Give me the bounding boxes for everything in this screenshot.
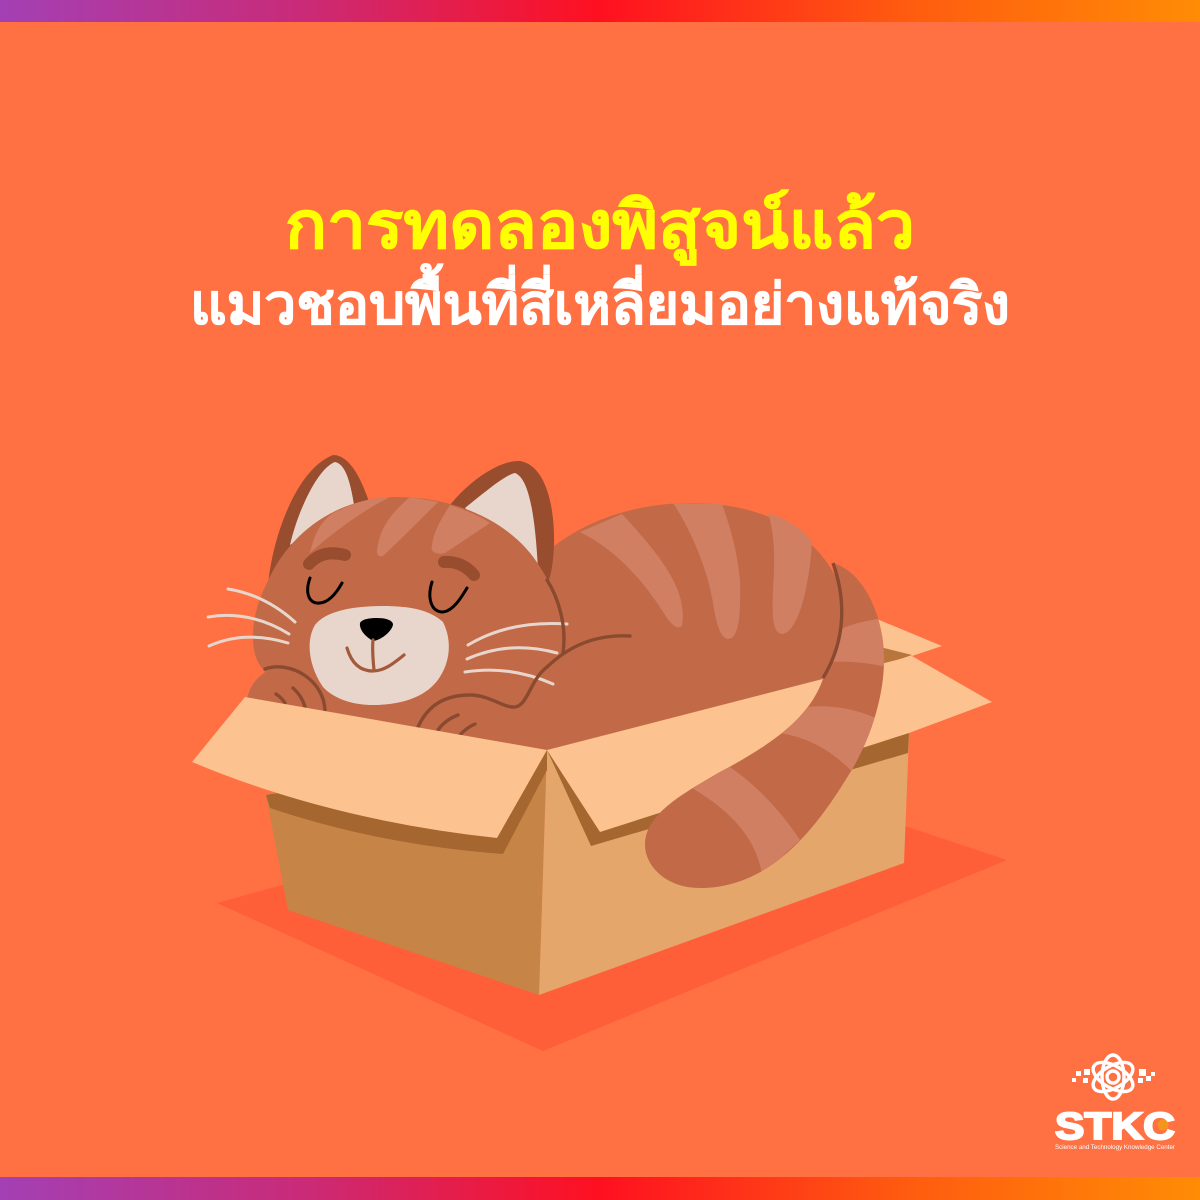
logo: STKC — [1055, 1055, 1175, 1151]
tail over flap — [645, 563, 890, 888]
cat body — [300, 503, 841, 752]
left flap — [192, 697, 547, 838]
bottom gradient bar — [0, 1177, 1200, 1200]
logo orange dot — [1158, 1120, 1168, 1130]
title line 1: การทดลองพิสูจน์แล้ว — [285, 188, 915, 266]
muzzle — [310, 606, 449, 705]
title line 2: แมวชอบพื้นที่สี่เหลี่ยมอย่างแท้จริง — [190, 264, 1010, 336]
tail stripes — [692, 617, 890, 875]
cat outline lines — [265, 580, 630, 735]
box left face — [266, 750, 547, 995]
closed eyes — [308, 578, 342, 603]
left inner shadow band — [266, 750, 547, 854]
box right face — [539, 735, 909, 995]
logo wordmark: STKC — [1055, 1106, 1175, 1148]
head stripes — [310, 497, 390, 553]
logo atom icon — [1088, 1055, 1138, 1099]
right inner shadow band — [547, 733, 909, 846]
cat left paw — [247, 663, 325, 730]
cat head — [208, 497, 567, 750]
box — [192, 656, 992, 995]
body stripes — [580, 514, 683, 627]
mouth — [347, 640, 404, 671]
whiskers — [208, 589, 567, 684]
top gradient bar — [0, 0, 1200, 22]
right flap — [547, 656, 992, 832]
logo squares — [1072, 1069, 1155, 1083]
floor shadow — [217, 826, 1007, 1051]
cat ears — [268, 455, 554, 585]
nose — [360, 618, 393, 641]
back flap of box — [860, 612, 942, 680]
body-tail divider line — [823, 563, 842, 678]
title — [190, 188, 1010, 336]
eyebrows — [309, 553, 345, 564]
logo tagline: Science and Technology Knowledge Center — [1055, 1145, 1175, 1151]
illustration: cat in box — [192, 455, 992, 995]
